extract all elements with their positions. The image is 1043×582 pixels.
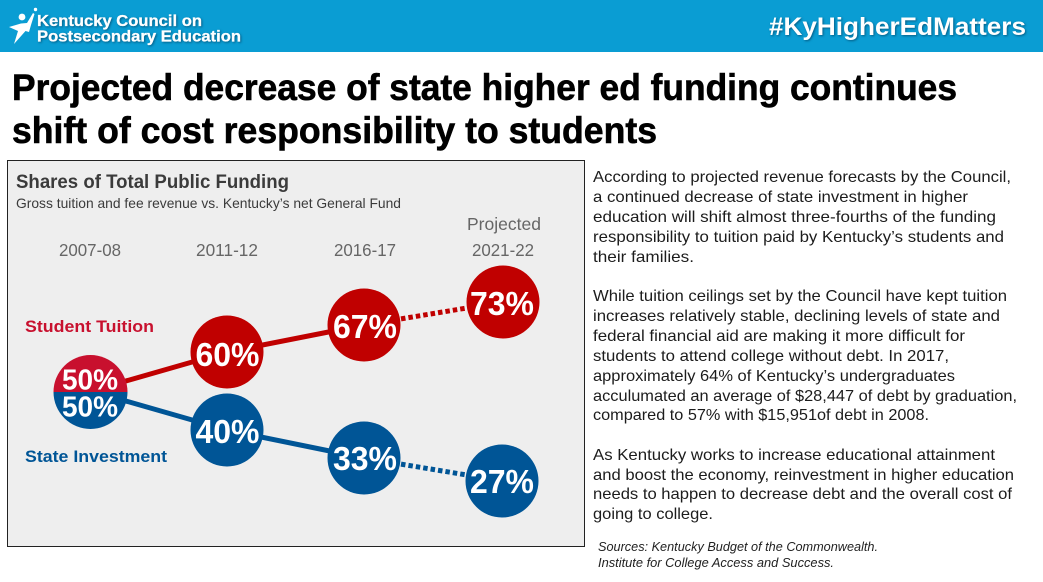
icon: star figure logo <box>9 8 37 44</box>
text block: paragraph 2: acculumated an average of $28,447 of debt by graduation, <box>593 388 1017 405</box>
circle: 2007-08 split 50% / 50% <box>54 355 128 429</box>
text block: paragraph 1: responsibility to tuition paid by Kentucky’s students and <box>593 229 1004 246</box>
text block: paragraph 3: going to college. <box>593 506 713 523</box>
year labels: Projected <box>467 214 541 234</box>
circle: state 40%: 40% <box>196 413 260 450</box>
title: shift of cost responsibility to students <box>12 110 657 151</box>
text block: paragraph 3: As Kentucky works to increase educational attainment <box>593 447 996 464</box>
text block: paragraph 2: While tuition ceilings set by the Council have kept tuition <box>593 288 1007 305</box>
text block: paragraph 2: increases relatively stable, declining levels of state and <box>593 308 1000 325</box>
text block: paragraph 3: and boost the economy, reinvestment in higher education <box>593 467 1014 484</box>
text block: paragraph 2: approximately 64% of Kentucky’s undergraduates <box>593 368 955 385</box>
circle: 2007-08 split 50% / 50%: 50% <box>62 392 118 424</box>
text block: paragraph 2: compared to 57% with $15,951of debt in 2008. <box>593 407 929 424</box>
circle: 2007-08 split 50% / 50%: 50% <box>62 364 118 396</box>
circle: tuition 73%: 73% <box>470 285 534 322</box>
text block: paragraph 2: students to attend college without debt. In 2017, <box>593 348 949 365</box>
circle: state 27% <box>466 444 538 518</box>
text block: paragraph 2: federal financial aid are making it more difficult for <box>593 328 966 345</box>
year labels: 2021-22 <box>472 240 534 260</box>
year labels: 2011-12 <box>196 240 258 260</box>
chart subtitle: Gross tuition and fee revenue vs. Kentucky’s net General Fund <box>16 195 401 211</box>
circle: tuition 60%: 60% <box>196 336 260 373</box>
text block: paragraph 3 <box>593 447 1014 523</box>
circle: tuition 60% <box>190 316 264 388</box>
series label: state investment: State Investment <box>25 447 167 466</box>
circle: state 40% <box>190 394 264 466</box>
panel: shares of total public funding chart <box>8 160 584 546</box>
chart heading: Shares of Total Public Funding <box>16 171 289 193</box>
text block: paragraph 1 <box>593 169 1011 266</box>
title <box>12 67 957 151</box>
text block: paragraph 3: needs to happen to decrease debt and the overall cost of <box>593 486 1013 503</box>
circle: tuition 67% <box>328 288 400 362</box>
logo text: Kentucky Council on <box>37 13 202 30</box>
header banner <box>0 0 1043 52</box>
text block: paragraph 2 <box>593 288 1017 424</box>
circle: tuition 73% <box>466 266 540 338</box>
circle: state 33% <box>328 422 400 494</box>
year labels <box>59 214 541 260</box>
year labels: 2007-08 <box>59 240 121 260</box>
title: Projected decrease of state higher ed funding continues <box>12 67 957 108</box>
sources note: Institute for College Access and Success. <box>598 556 834 570</box>
logo text <box>37 13 241 46</box>
circle: state 33%: 33% <box>333 440 397 477</box>
text block: paragraph 1: education will shift almost three-fourths of the funding <box>593 209 996 226</box>
year labels: 2016-17 <box>334 240 396 260</box>
text block: paragraph 1: According to projected revenue forecasts by the Council, <box>593 169 1011 186</box>
circle: state 27%: 27% <box>470 463 534 500</box>
logo text: Postsecondary Education <box>37 28 241 46</box>
text block: paragraph 1: their families. <box>593 249 694 266</box>
circle: tuition 67%: 67% <box>333 308 397 345</box>
hashtag: #KyHigherEdMatters <box>769 13 1026 41</box>
line: student tuition <box>91 302 503 391</box>
sources note <box>598 540 878 570</box>
series label: student tuition: Student Tuition <box>25 317 154 336</box>
line: state investment <box>91 391 503 481</box>
text block: paragraph 1: a continued decrease of state investment in higher <box>593 189 969 206</box>
sources note: Sources: Kentucky Budget of the Commonwealth. <box>598 540 878 554</box>
